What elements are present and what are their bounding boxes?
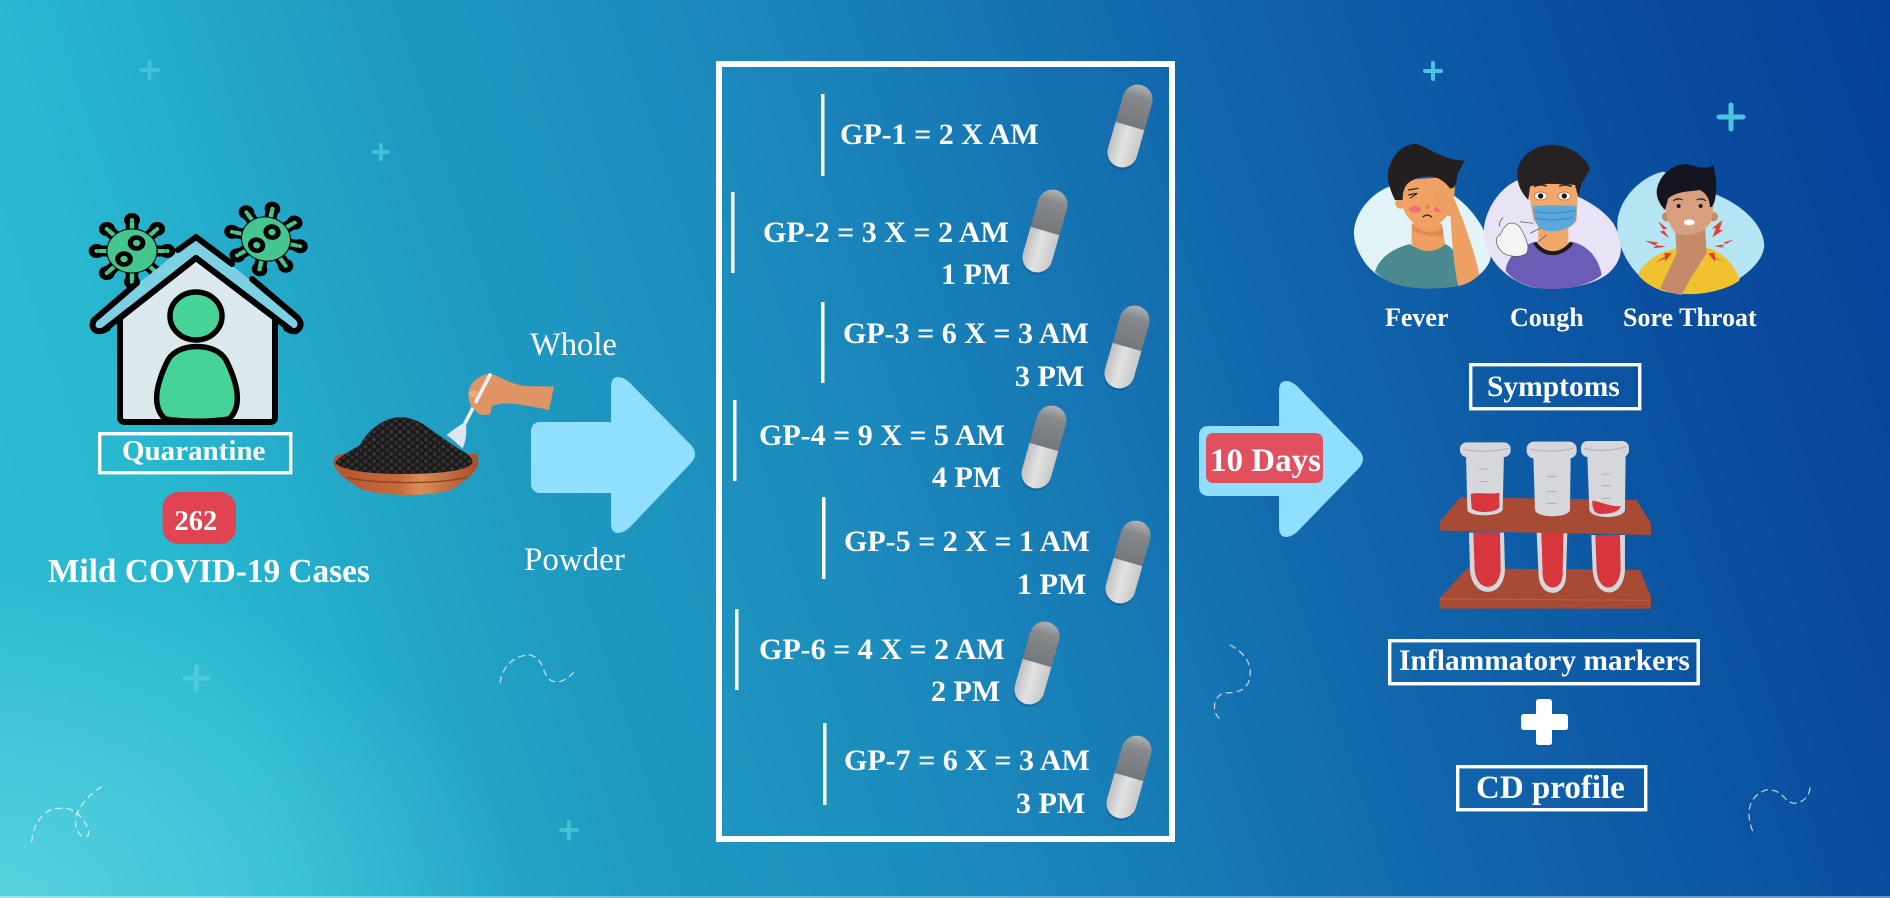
group: GP-5: 1 PM [1017, 568, 1086, 601]
group: GP-5: GP-5 = 2 X = 1 AM [844, 525, 1090, 558]
label: symptoms [1471, 365, 1640, 409]
panel: dosing groups [719, 64, 1172, 839]
illustration: fever [1354, 144, 1491, 288]
icon: plus [1521, 699, 1568, 745]
group: GP-2: 1 PM [941, 258, 1010, 291]
group: GP-3: GP-3 = 6 X = 3 AM [843, 317, 1089, 350]
illustration: bowl of black seeds with hand and spoon [333, 373, 554, 495]
illustration: blood test tubes in rack [1439, 441, 1651, 609]
group: GP-2: GP-2 = 3 X = 2 AM [763, 216, 1009, 249]
icon: viruses over house [92, 196, 312, 422]
bottom edge strip [0, 896, 1890, 898]
panel: quarantine group [48, 196, 370, 590]
panel: symptoms [1354, 144, 1764, 409]
group: GP-1 [821, 81, 1156, 176]
text: whole: Whole [530, 327, 617, 363]
group: GP-7: GP-7 = 6 X = 3 AM [844, 744, 1090, 777]
label: fever: Fever [1385, 303, 1449, 332]
text: mild covid-19 cases: Mild COVID-19 Cases [48, 553, 370, 590]
group: GP-4: GP-4 = 9 X = 5 AM [759, 419, 1005, 452]
group: GP-3 [821, 302, 1153, 394]
badge: 262 [162, 492, 236, 544]
arrow: 10 days: 10 Days [1210, 443, 1321, 479]
label: sore throat: Sore Throat [1623, 303, 1757, 332]
group: GP-2 [731, 186, 1071, 291]
label: quarantine: Quarantine [122, 435, 266, 467]
arrow: 10 days [1199, 381, 1363, 537]
illustration: sore throat [1617, 164, 1764, 295]
group: GP-5 [822, 497, 1154, 609]
group: GP-7 [823, 723, 1155, 824]
illustration: cough [1484, 145, 1621, 289]
group: GP-6: 2 PM [931, 675, 1000, 708]
label: cd profile: CD profile [1476, 770, 1625, 806]
arrow: to dosing groups [531, 377, 695, 533]
group: GP-4 [733, 400, 1070, 494]
text: powder: Powder [524, 542, 625, 578]
group: GP-6: GP-6 = 4 X = 2 AM [759, 633, 1005, 666]
label: symptoms: Symptoms [1487, 371, 1620, 403]
group: GP-3: 3 PM [1015, 360, 1084, 393]
group: GP-1: GP-1 = 2 X AM [840, 118, 1039, 151]
label: quarantine [100, 434, 291, 473]
label: cd profile [1458, 767, 1646, 810]
panel frame [719, 64, 1172, 839]
group: GP-4: 4 PM [932, 461, 1001, 494]
panel: lab tests [1390, 441, 1698, 810]
label: inflammatory markers: Inflammatory markers [1399, 645, 1690, 677]
group: GP-7: 3 PM [1016, 787, 1085, 820]
group: GP-6 [735, 609, 1063, 710]
badge: 262: 262 [174, 506, 217, 537]
label: cough: Cough [1510, 303, 1584, 332]
